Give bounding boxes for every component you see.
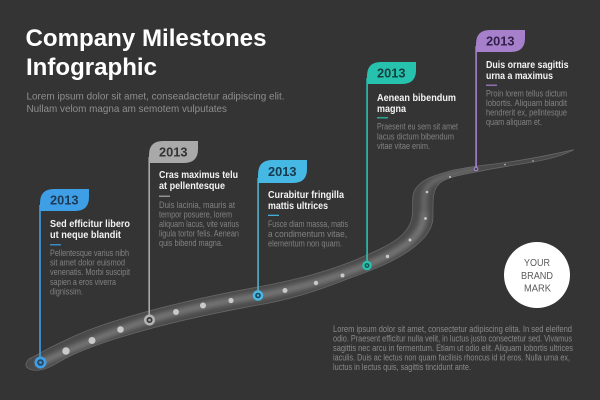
road dots <box>62 160 534 355</box>
marker 4 <box>362 261 372 270</box>
year tag 5 <box>476 30 525 52</box>
heading 3: Curabitur fringilla <box>268 190 344 201</box>
year tag 4 <box>367 62 416 84</box>
heading 2 <box>159 170 238 192</box>
body 4: lacus dictum bibendum <box>377 132 454 142</box>
heading 2: Cras maximus telu <box>159 170 238 181</box>
brand mark: BRAND <box>521 270 553 282</box>
milestone 5 <box>474 30 569 171</box>
heading 3 <box>268 190 344 212</box>
stem 3 <box>257 178 259 296</box>
heading 2: at pellentesque <box>159 181 226 192</box>
heading 3: mattis ultrices <box>268 201 328 212</box>
heading 5: urna a maximus <box>486 71 553 82</box>
divider 2 <box>159 196 170 197</box>
title: Company Milestones <box>26 25 266 52</box>
stem 4 <box>366 78 368 266</box>
divider 3 <box>268 215 279 216</box>
heading 1: Sed efficitur libero <box>50 219 130 230</box>
heading 5: Duis ornare sagittis <box>486 60 569 71</box>
year tag 2 <box>149 141 198 163</box>
heading 4: Aenean bibendum <box>377 93 456 104</box>
body 5 <box>486 89 567 127</box>
marker 1 <box>34 356 46 368</box>
year tag 5: 2013 <box>486 35 515 49</box>
footer text <box>333 324 573 372</box>
milestone 4 <box>362 62 458 270</box>
milestone 2 <box>144 141 239 326</box>
body 4: Praesent eu sem sit amet <box>377 122 458 132</box>
year tag 1 <box>40 189 89 211</box>
divider 1 <box>50 244 61 245</box>
stem 1 <box>39 205 41 363</box>
body 2: quis bibend magna. <box>159 238 223 248</box>
body 3: Fusce diam massa, matis <box>268 219 348 229</box>
year tag 3: 2013 <box>268 165 297 179</box>
body 1: dignissim. <box>50 286 83 296</box>
body 2: ligula tortor felis. Aenean <box>159 228 239 238</box>
heading 4: magna <box>377 104 407 115</box>
brand mark <box>504 242 570 308</box>
body 4: vitae vitae enim. <box>377 141 430 151</box>
body 1: venenatis. Morbi suscipit <box>50 267 130 277</box>
body 5: lobortis. Aliquam blandit <box>486 98 567 108</box>
milestone 1 <box>34 189 130 368</box>
body 5: Proin lorem tellus dictum <box>486 89 567 99</box>
marker 3 <box>253 290 263 301</box>
body 1: sapien a eros viverra <box>50 277 116 287</box>
body 5: quam aliquam et. <box>486 117 542 127</box>
year tag 1: 2013 <box>50 194 79 208</box>
title: Infographic <box>26 54 157 81</box>
body 2: Duis lacinia, mauris at <box>159 200 235 210</box>
stem 2 <box>148 157 150 320</box>
body 5: hendrerit ex, pellntesque <box>486 108 567 118</box>
year tag 3 <box>258 160 307 183</box>
intro text <box>26 92 284 115</box>
heading 4 <box>377 93 456 115</box>
body 1 <box>50 248 130 296</box>
divider 4 <box>377 117 388 118</box>
body 1: Pellentesque varius nibh <box>50 248 129 258</box>
timeline road <box>26 150 574 370</box>
marker 5 <box>474 167 478 171</box>
milestone 3 <box>253 160 348 301</box>
year tag 4: 2013 <box>377 66 406 80</box>
marker 2 <box>144 314 155 326</box>
body 4 <box>377 122 458 151</box>
title <box>26 25 266 81</box>
intro text: Lorem ipsum dolor sit amet, conseadactetur adipiscing elit. <box>26 92 284 102</box>
body 2 <box>159 200 239 248</box>
body 3: elementum non quam. <box>268 238 342 248</box>
heading 5 <box>486 60 569 82</box>
body 2: aliquam lacus, vite varius <box>159 219 239 229</box>
year tag 2: 2013 <box>159 146 188 160</box>
body 1: sit amet dolor euismod <box>50 258 125 268</box>
footer text: luctus in lectus quis, sagittis tincidunt ante. <box>333 362 471 372</box>
body 3: a condimentum vitae, <box>268 229 347 239</box>
divider 5 <box>486 85 497 86</box>
brand mark: MARK <box>524 282 551 294</box>
body 3 <box>268 219 348 248</box>
body 2: tempor posuere, lorem <box>159 210 232 220</box>
heading 1 <box>50 219 130 241</box>
heading 1: ut neque blandit <box>50 230 122 241</box>
intro text: Nullam velom magna am semotem vulputates <box>26 104 227 115</box>
brand mark: YOUR <box>524 257 550 269</box>
stem 5 <box>475 46 477 169</box>
